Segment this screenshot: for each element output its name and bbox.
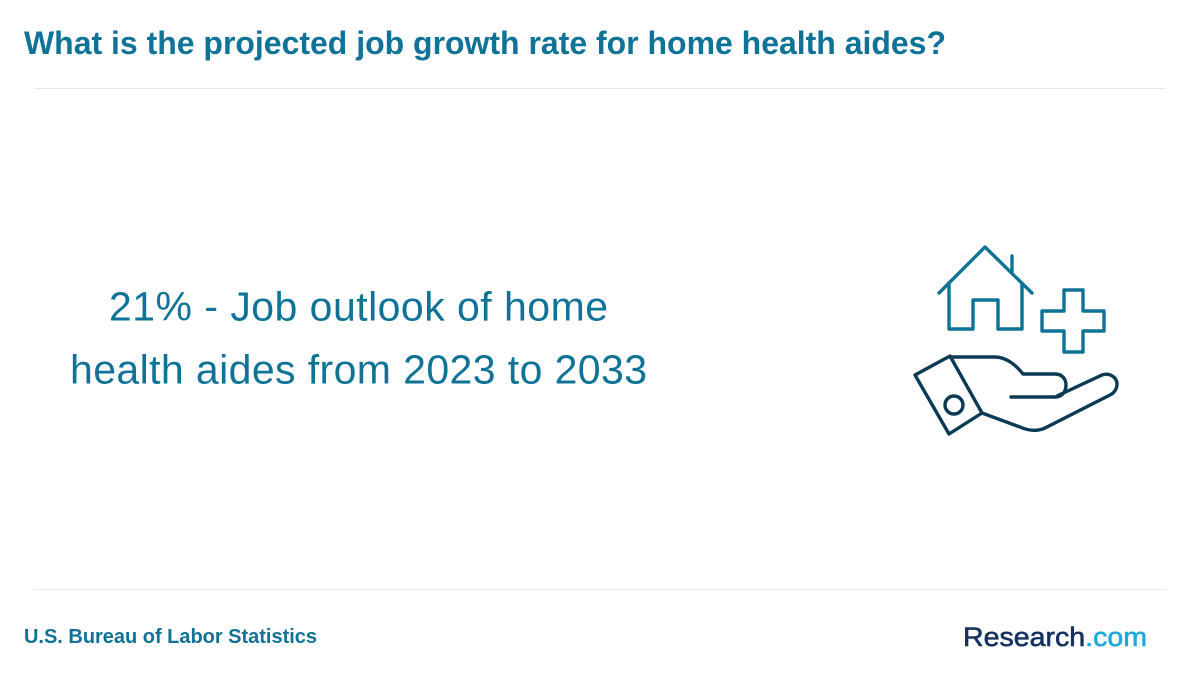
icon: home health care <box>915 247 1117 434</box>
main statistic text: health aides from 2023 to 2033 <box>70 346 647 392</box>
icon: house <box>939 247 1032 329</box>
icon: open hand <box>915 356 1117 434</box>
title: What is the projected job growth rate for home health aides? <box>24 25 946 61</box>
logo: Research.com <box>963 622 1147 652</box>
main statistic text: 21% - Job outlook of home <box>109 284 608 330</box>
source: U.S. Bureau of Labor Statistics <box>24 626 317 648</box>
icon: medical cross <box>1042 290 1104 352</box>
main statistic text <box>70 284 647 392</box>
